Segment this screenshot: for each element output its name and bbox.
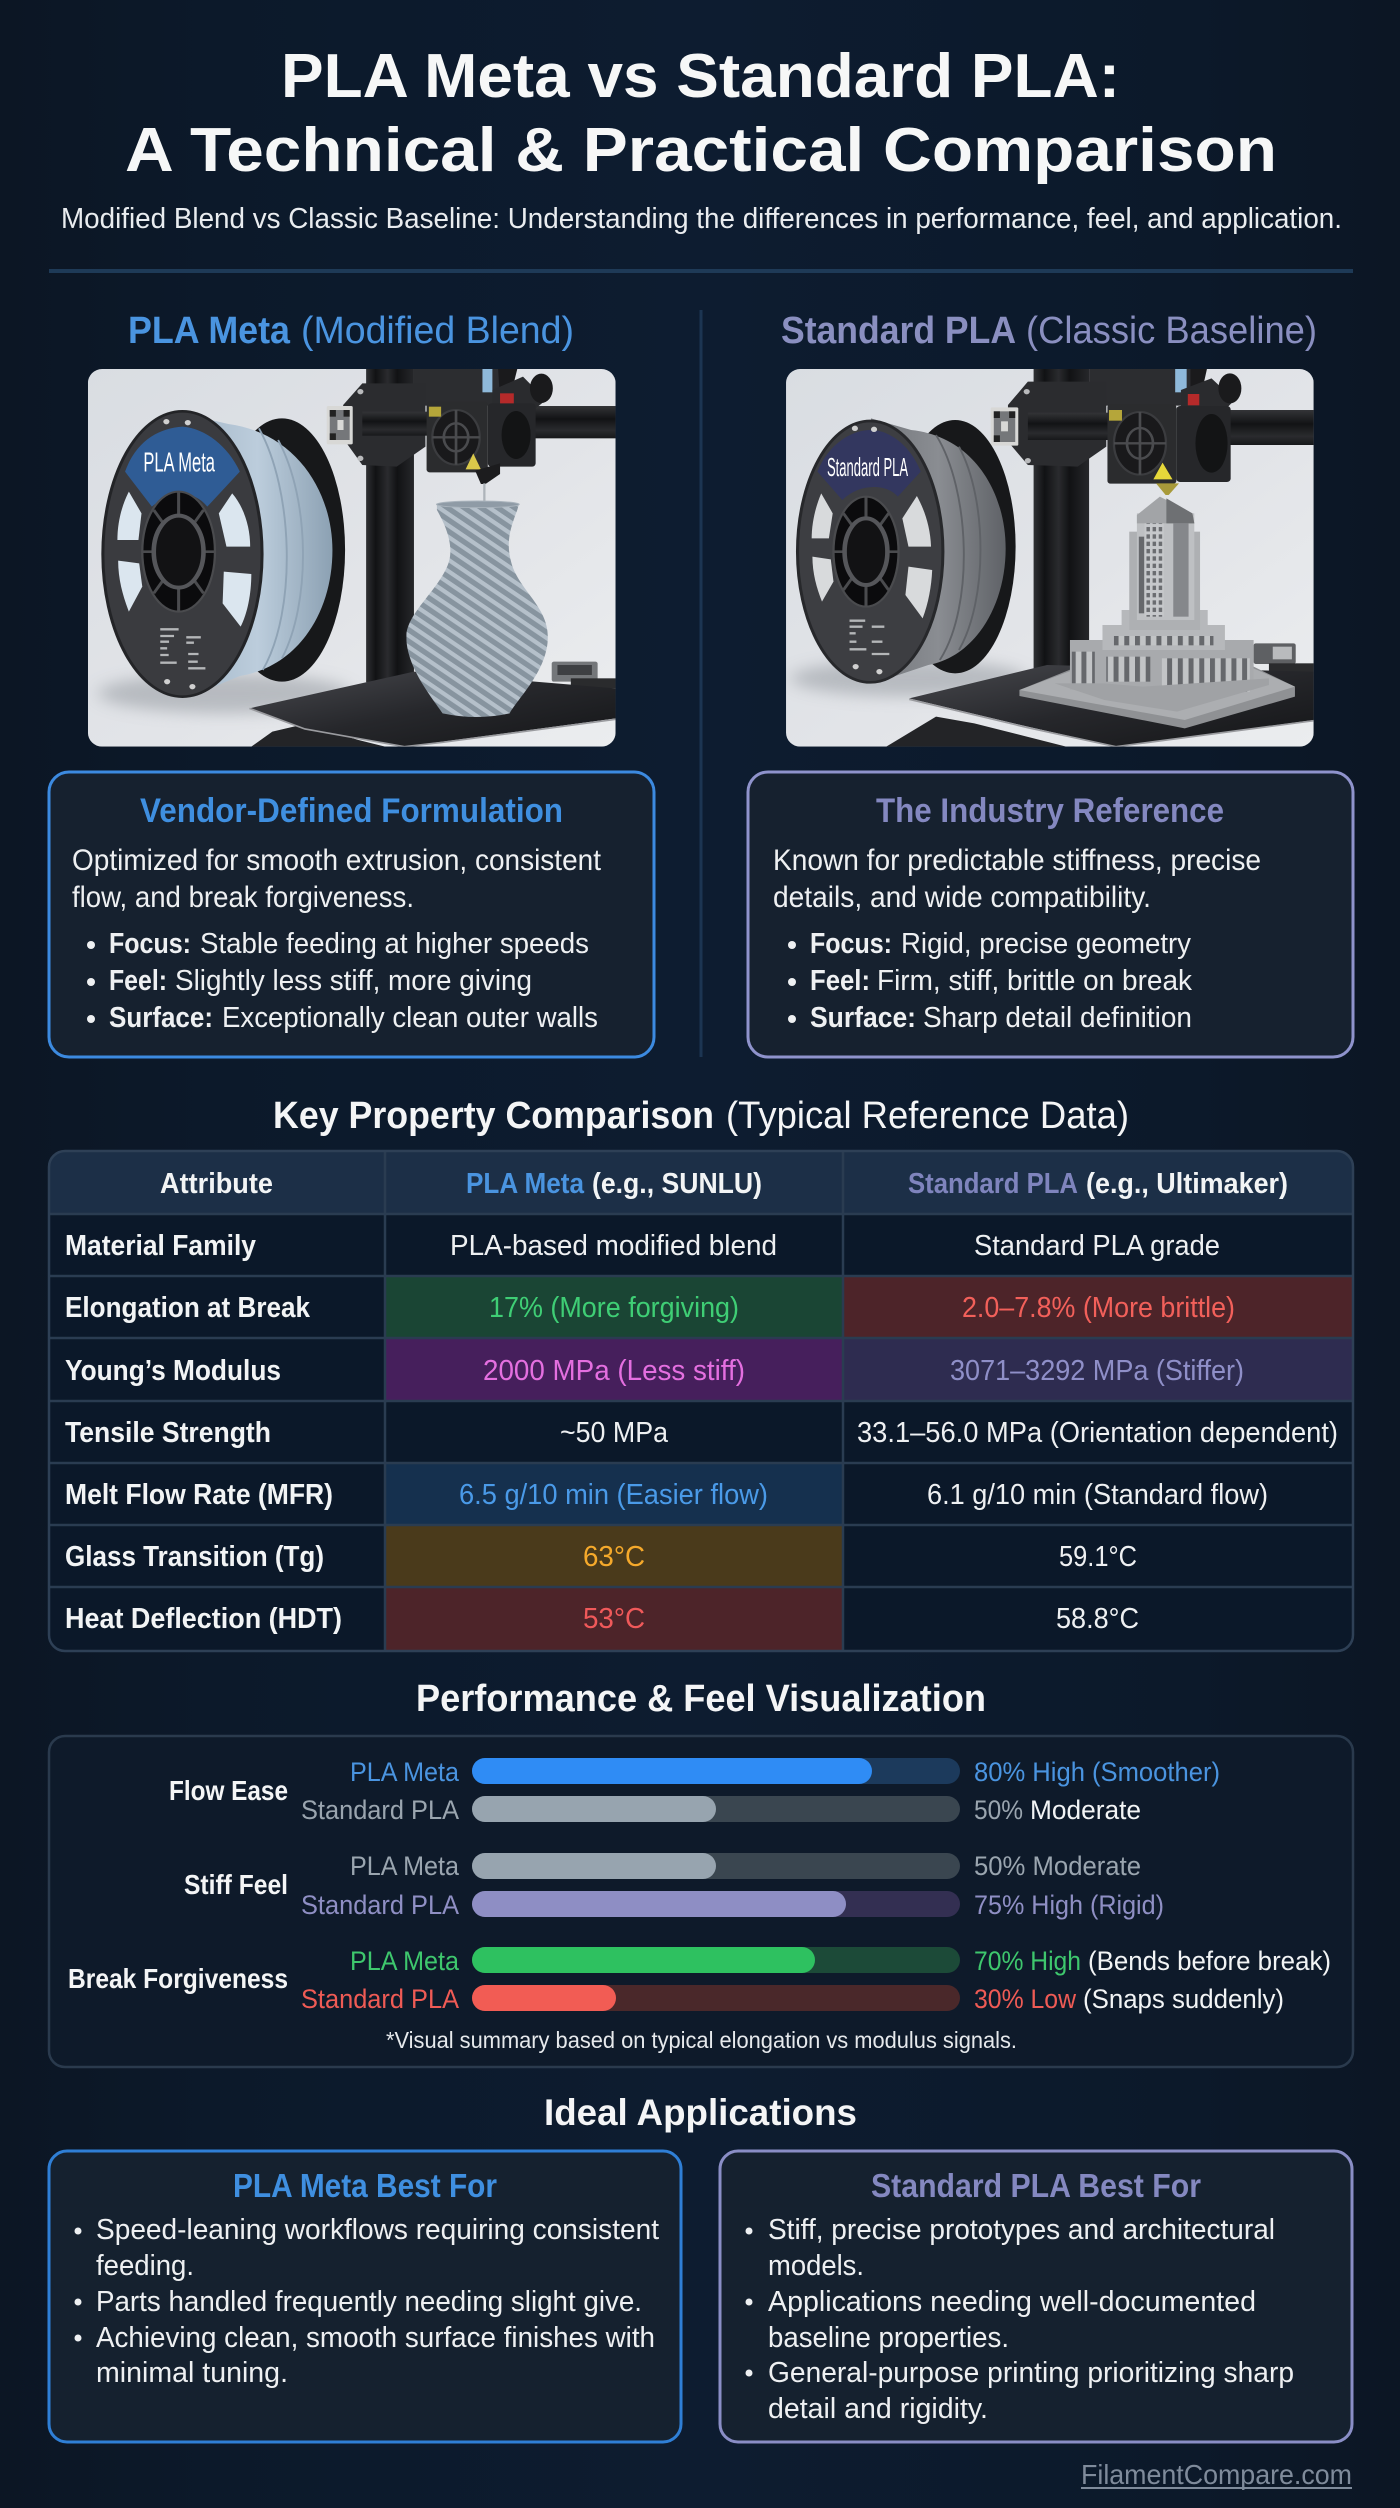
heading: Standard PLA column: (Classic Baseline) <box>1026 310 1317 352</box>
chart group: Stiff Feel: Stiff Feel <box>184 1869 288 1900</box>
heading: Standard PLA column <box>781 310 1317 352</box>
illustration: Standard PLA spool and printer with building <box>786 369 1314 747</box>
section heading: key property comparison: (Typical Reference Data) <box>726 1095 1129 1137</box>
card list: General-purpose printing prioritizing sharp <box>768 2357 1294 2389</box>
card bullets: Sharp detail definition <box>923 1002 1192 1034</box>
table header row: Standard PLA <box>908 1168 1078 1200</box>
print head <box>427 369 553 504</box>
chart group: Flow Ease: PLA Meta <box>350 1757 460 1787</box>
card list: minimal tuning. <box>96 2357 288 2389</box>
row labels <box>65 1230 342 1635</box>
table header row: Attribute <box>160 1168 273 1200</box>
card bullets <box>87 928 598 1034</box>
vase <box>402 500 552 723</box>
card heading: Vendor-Defined Formulation <box>140 792 563 830</box>
chart group: Break Forgiveness: Break Forgiveness <box>68 1963 288 1994</box>
card bullets: Surface: <box>109 1002 213 1034</box>
PLA Meta values: 53°C <box>583 1603 645 1635</box>
spool <box>103 411 345 697</box>
row labels: Glass Transition (Tg) <box>65 1541 324 1573</box>
card bullets: Feel: <box>810 965 870 997</box>
printer frame <box>991 369 1314 669</box>
Standard PLA values: 33.1–56.0 MPa (Orientation dependent) <box>857 1417 1338 1449</box>
card description <box>72 844 602 914</box>
chart group: Stiff Feel: PLA Meta <box>350 1851 460 1881</box>
card bullets: Feel: <box>109 965 167 997</box>
heading: Standard PLA column: Standard PLA <box>781 310 1016 352</box>
comparison table <box>49 1151 1353 1651</box>
chart group: Stiff Feel <box>184 1851 1164 1920</box>
card bullets: Slightly less stiff, more giving <box>175 965 532 997</box>
card list: feeding. <box>96 2250 194 2282</box>
Standard PLA values: 6.1 g/10 min (Standard flow) <box>927 1479 1268 1511</box>
chart group: Break Forgiveness: 30% Low <box>974 1984 1076 2014</box>
title: PLA Meta vs Standard PLA: <box>281 42 1120 111</box>
chart group: Stiff Feel: Standard PLA <box>301 1890 459 1920</box>
card bullets: Focus: <box>109 928 191 960</box>
card bullets: Focus: <box>810 928 892 960</box>
PLA Meta values: PLA-based modified blend <box>450 1230 777 1262</box>
title: A Technical & Practical Comparison <box>125 116 1277 185</box>
title <box>125 42 1277 185</box>
row labels: Material Family <box>65 1230 256 1262</box>
panel: performance bar chart <box>49 1736 1353 2067</box>
card heading: The Industry Reference <box>876 792 1224 830</box>
chart group: Break Forgiveness: Standard PLA <box>301 1984 459 2014</box>
chart group: Flow Ease <box>169 1757 1220 1825</box>
chart group: Flow Ease: Moderate <box>1030 1795 1141 1825</box>
illustration: PLA Meta spool and printer with vase <box>88 369 616 747</box>
PLA Meta values: 63°C <box>583 1541 645 1573</box>
section heading: key property comparison <box>273 1095 1129 1137</box>
Standard PLA values: 3071–3292 MPa (Stiffer) <box>950 1355 1244 1387</box>
chart group: Break Forgiveness <box>68 1946 1331 2014</box>
chart group: Flow Ease: Flow Ease <box>169 1775 288 1806</box>
chart group: Flow Ease: 50% <box>974 1795 1023 1825</box>
spool <box>797 418 1016 682</box>
row labels: Tensile Strength <box>65 1417 271 1449</box>
card list: baseline properties. <box>768 2322 1009 2354</box>
card bullets: Exceptionally clean outer walls <box>222 1002 598 1034</box>
card description: details, and wide compatibility. <box>773 881 1151 914</box>
Standard PLA values: 2.0–7.8% (More brittle) <box>962 1292 1235 1324</box>
card bullets: Stable feeding at higher speeds <box>200 928 589 960</box>
spool: PLA Meta <box>143 448 215 478</box>
card heading: Standard PLA Best For <box>871 2167 1201 2204</box>
PLA Meta values: 17% (More forgiving) <box>489 1292 739 1324</box>
section heading: key property comparison: Key Property Comparison <box>273 1095 714 1137</box>
PLA Meta values: 6.5 g/10 min (Easier flow) <box>459 1479 768 1511</box>
card heading: PLA Meta Best For <box>233 2167 497 2204</box>
card list: models. <box>768 2250 864 2282</box>
spool: Standard PLA <box>827 453 908 482</box>
building model <box>1019 497 1295 728</box>
chart group: Break Forgiveness: PLA Meta <box>350 1946 460 1976</box>
chart group: Break Forgiveness: (Snaps suddenly) <box>1083 1984 1284 2014</box>
chart group: Break Forgiveness: (Bends before break) <box>1088 1946 1331 1976</box>
card description: flow, and break forgiveness. <box>72 881 414 914</box>
table header row <box>160 1168 1288 1200</box>
card bullets <box>788 928 1192 1034</box>
Standard PLA values <box>857 1230 1338 1635</box>
row labels: Elongation at Break <box>65 1292 311 1324</box>
card list: Parts handled frequently needing slight give. <box>96 2286 642 2318</box>
motor <box>552 662 616 688</box>
panel: PLA Meta best for <box>49 2151 681 2442</box>
Standard PLA values: Standard PLA grade <box>974 1230 1220 1262</box>
chart group: Flow Ease: Standard PLA <box>301 1795 459 1825</box>
print bed <box>249 672 616 747</box>
print head <box>1107 369 1241 495</box>
card description <box>773 844 1261 914</box>
chart group: Flow Ease: 80% High (Smoother) <box>974 1757 1220 1787</box>
row labels: Heat Deflection (HDT) <box>65 1603 342 1635</box>
chart group: Stiff Feel: 50% Moderate <box>974 1851 1141 1881</box>
PLA Meta values: ~50 MPa <box>560 1417 669 1449</box>
panel: The Industry Reference <box>748 772 1353 1057</box>
table header row: (e.g., Ultimaker) <box>1086 1168 1288 1200</box>
Standard PLA values: 58.8°C <box>1056 1603 1139 1635</box>
printer frame <box>327 369 616 682</box>
section heading: performance and feel: Performance & Feel Visualization <box>416 1678 986 1720</box>
card list <box>746 2214 1294 2425</box>
chart footnote: *Visual summary based on typical elongation vs modulus signals. <box>386 2027 1017 2053</box>
card description: Known for predictable stiffness, precise <box>773 844 1261 877</box>
card list: Speed-leaning workflows requiring consistent <box>96 2214 659 2246</box>
card description: Optimized for smooth extrusion, consistent <box>72 844 602 877</box>
card bullets: Firm, stiff, brittle on break <box>877 965 1192 997</box>
subtitle: Modified Blend vs Classic Baseline: Understanding the differences in performance, feel, and application. <box>61 203 1342 235</box>
PLA Meta values: 2000 MPa (Less stiff) <box>483 1355 745 1387</box>
footer credit: FilamentCompare.com <box>1081 2459 1352 2490</box>
panel: Standard PLA best for <box>720 2151 1352 2442</box>
card bullets: Surface: <box>810 1002 916 1034</box>
card list: Stiff, precise prototypes and architectural <box>768 2214 1275 2246</box>
card list: Applications needing well-documented <box>768 2286 1256 2318</box>
panel: Vendor-Defined Formulation <box>49 772 654 1057</box>
chart group: Break Forgiveness: 70% High <box>974 1946 1081 1976</box>
row labels: Young’s Modulus <box>65 1355 281 1387</box>
card bullets: Rigid, precise geometry <box>901 928 1191 960</box>
heading: PLA Meta column <box>128 310 574 352</box>
chart group: Stiff Feel: 75% High (Rigid) <box>974 1890 1164 1920</box>
heading: PLA Meta column: PLA Meta <box>128 310 291 352</box>
heading: PLA Meta column: (Modified Blend) <box>301 310 574 352</box>
motor <box>1254 643 1314 673</box>
row labels: Melt Flow Rate (MFR) <box>65 1479 333 1511</box>
card list <box>74 2214 659 2389</box>
Standard PLA values: 59.1°C <box>1059 1541 1137 1573</box>
PLA Meta values <box>450 1230 777 1635</box>
card list: Achieving clean, smooth surface finishes with <box>96 2322 655 2354</box>
section heading: ideal applications: Ideal Applications <box>544 2092 857 2133</box>
print bed <box>886 665 1314 747</box>
table header row: (e.g., SUNLU) <box>592 1168 762 1200</box>
card list: detail and rigidity. <box>768 2393 988 2425</box>
table header row: PLA Meta <box>466 1168 585 1200</box>
